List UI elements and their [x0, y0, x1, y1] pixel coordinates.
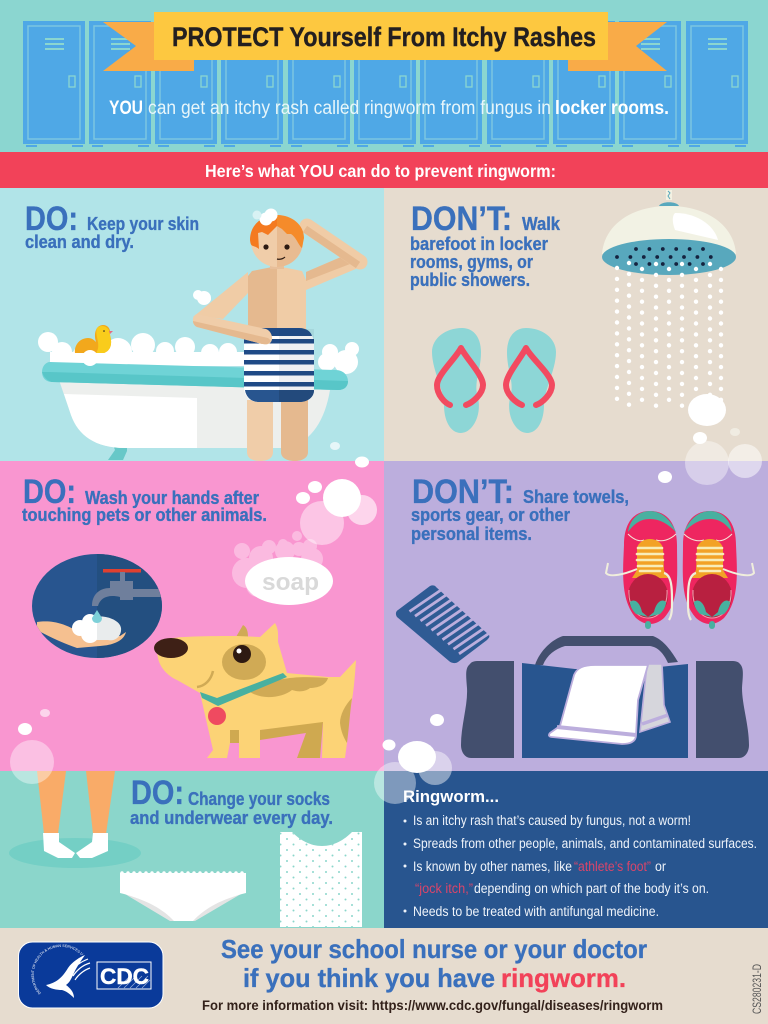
black shower holes — [617, 249, 723, 264]
heading: do keep skin clean: Keep your skin — [87, 214, 199, 234]
bullet list — [404, 813, 757, 919]
bullet list: depending on which part of the body it’s on. — [474, 881, 709, 896]
icon: sneakers — [606, 511, 754, 629]
heading: do change socks: and underwear every day. — [130, 808, 333, 828]
panel: change socks — [0, 771, 384, 928]
subtitle: YOU — [109, 98, 143, 119]
water droplets — [617, 263, 721, 406]
heading: do wash hands: DO: — [23, 473, 76, 511]
panel: do not share towels — [384, 461, 768, 771]
dog collar — [200, 673, 287, 706]
CDC logo: DEPARTMENT OF HEALTH & HUMAN SERVICES USA — [31, 944, 84, 994]
subtitle: can get an itchy rash called ringworm from fungus in — [148, 98, 551, 119]
heading: do keep skin clean: DO: — [25, 200, 78, 238]
icon: legs and socks — [37, 771, 115, 858]
icon: washing hands in circle — [32, 554, 162, 658]
heading: don't walk barefoot: rooms, gyms, or — [410, 252, 533, 272]
bullet list: or — [655, 859, 666, 874]
legs — [247, 400, 273, 461]
title: PROTECT Yourself From Itchy Rashes — [172, 22, 596, 52]
bullet list: Is an itchy rash that’s caused by fungus, not a worm! — [413, 813, 691, 828]
torso — [248, 266, 277, 335]
document code: CS280231-D — [752, 964, 764, 1014]
bullet list: Needs to be treated with antifungal medicine. — [413, 904, 659, 919]
foam — [38, 332, 359, 374]
hair — [250, 215, 277, 249]
towel — [549, 664, 670, 744]
bullet list: Is known by other names, like — [413, 859, 572, 874]
bubbles: bath foam by arm — [193, 290, 211, 305]
bullet list: “athlete’s foot” — [574, 859, 651, 874]
heading: don't walk barefoot — [410, 200, 561, 290]
heading: don't share: personal items. — [411, 524, 532, 544]
panel: keep skin clean — [0, 188, 384, 461]
bubbles: white top right — [296, 479, 377, 545]
raised upper arm — [306, 257, 358, 290]
icon: underwear — [120, 873, 246, 921]
heading: don't walk barefoot: DON’T: — [411, 200, 512, 238]
icon: shower head — [602, 190, 736, 406]
icon: rubber duck — [75, 325, 113, 366]
red heading band — [0, 152, 768, 188]
towel — [244, 328, 314, 402]
heading: do change socks: DO: — [131, 774, 184, 812]
heading: do keep skin clean — [25, 200, 199, 252]
heading: don't share: DON’T: — [412, 473, 514, 511]
band text: Here’s what YOU can do to prevent ringworm: — [205, 161, 556, 181]
forearm — [193, 314, 272, 344]
heading: do wash hands: Wash your hands after — [85, 488, 259, 508]
heading: do wash hands: touching pets or other animals. — [22, 505, 267, 525]
icon: flip flops — [432, 328, 556, 433]
bullet list: “jock itch,” — [415, 881, 473, 896]
shadow under feet — [9, 838, 141, 868]
floating bubbles across panels — [10, 394, 762, 804]
panel: wash hands — [0, 461, 384, 771]
heading: don't share — [411, 473, 629, 544]
website line: For more information visit: https://www.cdc.gov/fungal/diseases/ringworm — [202, 997, 663, 1013]
heading: don't share: Share towels, — [523, 487, 629, 507]
call to action: See your school nurse or your doctor — [221, 934, 647, 964]
soap foam in hand — [72, 614, 110, 643]
heading: do change socks: Change your socks — [188, 789, 330, 809]
icon: comb — [396, 585, 490, 663]
CDC box — [97, 962, 151, 989]
call to action — [221, 934, 647, 993]
heading: don't walk barefoot: barefoot in locker — [410, 234, 548, 254]
icon: boy in towel — [193, 208, 360, 461]
raised forearm — [307, 226, 360, 262]
heading: don't walk barefoot: public showers. — [410, 270, 530, 290]
panel: ringworm facts — [384, 771, 768, 928]
HHS seal text — [34, 947, 82, 993]
dog tag — [208, 707, 226, 725]
heading: don't share: sports gear, or other — [411, 505, 570, 525]
heading: don't walk barefoot: Walk — [522, 214, 561, 234]
header panel: lockers background — [0, 0, 768, 152]
icon: undershirt — [280, 832, 362, 927]
lockers row — [24, 22, 747, 147]
eagle — [46, 955, 85, 998]
CDC logo — [18, 942, 164, 1008]
title ribbon — [103, 12, 667, 71]
facts heading: Ringworm... — [403, 787, 499, 806]
icon: bathtub — [38, 332, 359, 460]
heading: do change socks — [130, 774, 333, 828]
panel: do not walk barefoot — [384, 188, 768, 461]
call to action: if you think you have — [243, 963, 495, 993]
soap bubbles cluster: soap — [262, 569, 319, 596]
head — [250, 208, 304, 269]
far arm — [193, 272, 248, 319]
heading: do wash hands — [22, 473, 267, 525]
heading: do keep skin clean: clean and dry. — [25, 232, 134, 252]
subtitle: locker rooms. — [555, 98, 669, 119]
soap bubbles cluster — [232, 531, 333, 605]
foam on head — [252, 208, 278, 226]
call to action: ringworm. — [501, 963, 626, 993]
soap bar — [245, 557, 333, 605]
icon: duffel bag — [461, 636, 749, 758]
CDC logo: CDC — [100, 964, 149, 989]
icon: dog — [154, 623, 356, 758]
